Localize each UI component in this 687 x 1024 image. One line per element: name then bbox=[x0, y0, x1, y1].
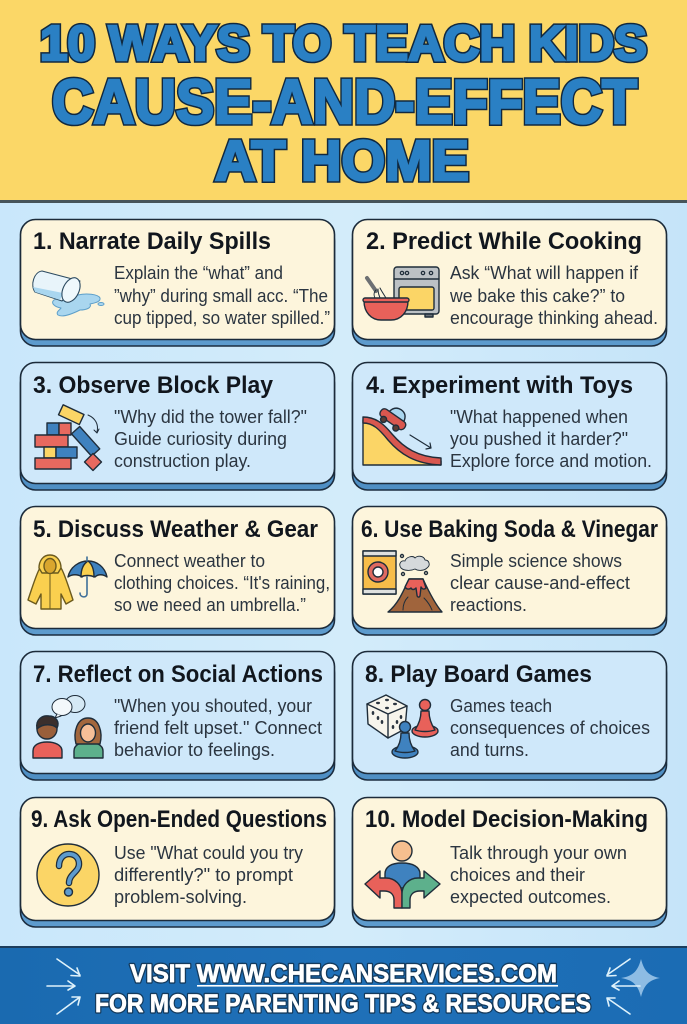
icon: footer left arrows bbox=[47, 959, 80, 1014]
title: 10 WAYS TO TEACH KIDS bbox=[40, 17, 647, 71]
footer call to action: FOR MORE PARENTING TIPS & RESOURCES bbox=[95, 990, 591, 1018]
body text 5: so we need an umbrella.” bbox=[114, 595, 306, 615]
heading 2: 2. Predict While Cooking bbox=[366, 228, 642, 255]
icon: footer sparkle star bbox=[621, 959, 660, 997]
heading 1: 1. Narrate Daily Spills bbox=[33, 228, 271, 255]
body text 6: clear cause-and-effect bbox=[450, 573, 630, 593]
body text 7: friend felt upset." Connect bbox=[114, 718, 322, 738]
icon: spilled cup bbox=[33, 271, 104, 316]
footer call to action: FOR MORE PARENTING TIPS & RESOURCES bbox=[95, 990, 591, 1018]
body text 4: "What happened when bbox=[450, 407, 628, 427]
card 2: Predict While Cooking bbox=[352, 220, 666, 346]
body text 3: Guide curiosity during bbox=[114, 429, 287, 449]
body text 4 bbox=[450, 407, 652, 471]
icon: two people talking bbox=[33, 696, 103, 758]
body text 7: behavior to feelings. bbox=[114, 740, 275, 760]
body text 1: cup tipped, so water spilled.” bbox=[114, 308, 330, 328]
body text 1: ”why” during small acc. “The bbox=[114, 286, 328, 306]
body text 5: clothing choices. “It's raining, bbox=[114, 573, 330, 593]
title: CAUSE-AND-EFFECT bbox=[52, 68, 637, 137]
body text 3: "Why did the tower fall?" bbox=[114, 407, 307, 427]
body text 1 bbox=[114, 263, 330, 328]
heading 8: 8. Play Board Games bbox=[365, 661, 592, 688]
heading 10: 10. Model Decision-Making bbox=[365, 806, 648, 833]
body text 8: and turns. bbox=[450, 740, 529, 760]
body text 6: Simple science shows bbox=[450, 551, 622, 571]
body text 2: Ask “What will happen if bbox=[450, 263, 639, 283]
body text 9: Use "What could you try bbox=[114, 843, 303, 863]
body text 5 bbox=[114, 551, 330, 615]
body text 4: you pushed it harder?" bbox=[450, 429, 628, 449]
icon: dice and game pawns bbox=[367, 695, 438, 758]
heading 4: 4. Experiment with Toys bbox=[366, 372, 633, 399]
icon: raincoat and umbrella bbox=[28, 555, 107, 609]
body text 6: reactions. bbox=[450, 595, 527, 615]
card 7: Reflect on Social Actions bbox=[20, 652, 334, 780]
body text 7 bbox=[114, 696, 322, 760]
body text 3 bbox=[114, 407, 307, 471]
heading 5: 5. Discuss Weather & Gear bbox=[33, 516, 318, 543]
icon: baking soda box and volcano bbox=[363, 551, 442, 612]
body text 5: Connect weather to bbox=[114, 551, 265, 571]
card 8: Play Board Games bbox=[352, 652, 666, 780]
heading 9: 9. Ask Open-Ended Questions bbox=[31, 806, 327, 833]
footer call to action: VISIT WWW.CHECANSERVICES.COM bbox=[130, 960, 557, 988]
card 4: Experiment with Toys bbox=[352, 362, 666, 490]
icon: falling block tower bbox=[35, 405, 101, 470]
body text 10: Talk through your own bbox=[450, 843, 627, 863]
title: AT HOME bbox=[215, 129, 469, 193]
icon: person choosing between two arrows bbox=[365, 841, 440, 908]
body text 1: Explain the “what” and bbox=[114, 263, 283, 283]
body text 8: consequences of choices bbox=[450, 718, 650, 738]
body text 6 bbox=[450, 551, 630, 615]
icon: question mark circle bbox=[37, 844, 99, 906]
body text 2 bbox=[449, 263, 658, 328]
title: AT HOME bbox=[215, 129, 469, 193]
card 5: Discuss Weather & Gear bbox=[20, 506, 334, 635]
body text 10: choices and their bbox=[450, 865, 585, 885]
title: 10 WAYS TO TEACH KIDS bbox=[40, 17, 647, 71]
body text 10: expected outcomes. bbox=[450, 887, 611, 907]
body text 9: differently?" to prompt bbox=[114, 865, 293, 885]
heading 3: 3. Observe Block Play bbox=[33, 372, 274, 399]
card 9: Ask Open-Ended Questions bbox=[20, 798, 334, 927]
footer call to action: VISIT WWW.CHECANSERVICES.COM bbox=[130, 960, 557, 988]
footer band bbox=[0, 946, 687, 1024]
title: CAUSE-AND-EFFECT bbox=[52, 68, 637, 137]
card 3: Observe Block Play bbox=[20, 362, 334, 490]
card 6: Use Baking Soda & Vinegar bbox=[352, 506, 666, 635]
body text 10 bbox=[450, 843, 627, 907]
body text 7: "When you shouted, your bbox=[114, 696, 312, 716]
body text 3: construction play. bbox=[114, 451, 251, 471]
icon: toy car on ramp bbox=[363, 401, 441, 465]
title bbox=[40, 17, 647, 193]
icon: oven and mixing bowl bbox=[363, 267, 439, 320]
card 1: Narrate Daily Spills bbox=[20, 220, 334, 346]
body text 2: encourage thinking ahead. bbox=[450, 308, 658, 328]
header band bbox=[0, 0, 687, 203]
body text 8: Games teach bbox=[450, 696, 552, 716]
footer call to action bbox=[95, 960, 591, 1018]
body text 9: problem-solving. bbox=[114, 887, 247, 907]
body text 8 bbox=[450, 696, 650, 760]
body text 9 bbox=[114, 843, 303, 907]
body text 2: we bake this cake?” to bbox=[449, 286, 625, 306]
card 10: Model Decision-Making bbox=[352, 798, 666, 927]
icon: footer right arrows bbox=[607, 959, 640, 1014]
heading 7: 7. Reflect on Social Actions bbox=[33, 661, 323, 688]
body text 4: Explore force and motion. bbox=[450, 451, 652, 471]
